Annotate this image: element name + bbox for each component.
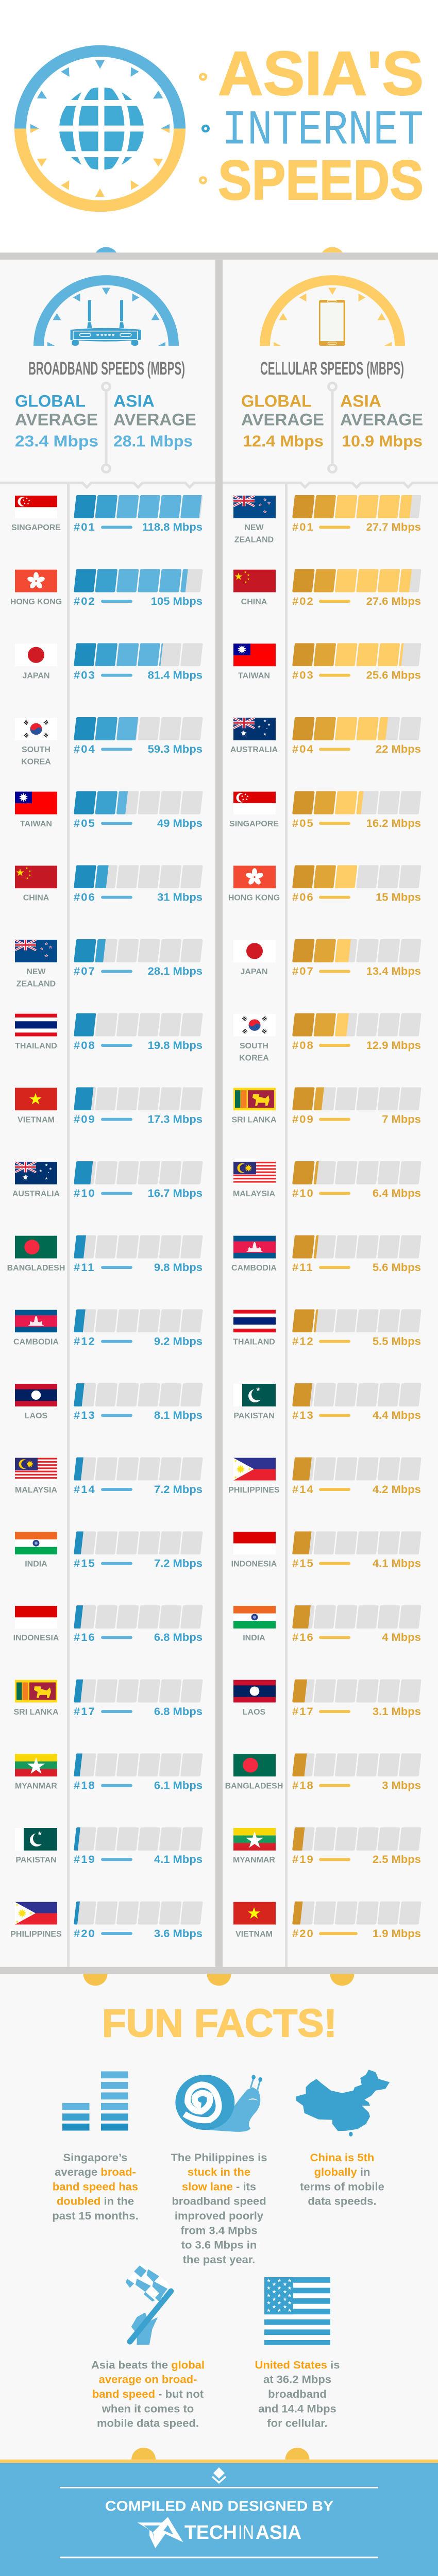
row: Vietnam: VIETNAM: [235, 1930, 273, 1939]
row: Sri Lanka: #09: [292, 1113, 314, 1125]
text: China fact: terms of mobile: [300, 2180, 384, 2193]
column dividers: [0, 260, 438, 1967]
row: Laos: [233, 1680, 422, 1718]
text: Philippines fact: stuck in the: [188, 2165, 250, 2178]
row: Cambodia: [231, 1235, 422, 1274]
stat divider: [329, 383, 336, 472]
row: Indonesia: [231, 1531, 422, 1569]
row: Hong Kong: [10, 569, 203, 607]
logo: Tech in Asia: ASIA: [256, 2521, 301, 2544]
icon: checkered flag: [126, 2263, 171, 2345]
row: Bangladesh: #18: [292, 1779, 314, 1791]
row: Philippines: #20: [74, 1927, 96, 1940]
row: Thailand: THAILAND: [15, 1042, 57, 1050]
row: South Korea: KOREA: [21, 758, 51, 767]
row: India: 7.2 Mbps: [154, 1557, 203, 1569]
row: Singapore: [229, 791, 422, 829]
logo: Tech in Asia: TECH: [184, 2521, 237, 2544]
row: South Korea: #08: [292, 1039, 314, 1052]
row: Taiwan: TAIWAN: [20, 820, 52, 828]
row: Vietnam: 17.3 Mbps: [148, 1113, 203, 1125]
row: Malaysia: 6.4 Mbps: [373, 1187, 421, 1199]
row: Myanmar: [233, 1827, 422, 1866]
row: Cambodia: CAMBODIA: [13, 1338, 59, 1346]
stat: asia average: 10.9 Mbps: [342, 433, 423, 450]
stat: global average: [15, 392, 98, 450]
row: Thailand: #12: [292, 1335, 314, 1347]
row: Malaysia: MALAYSIA: [233, 1190, 275, 1198]
row: Indonesia: 4.1 Mbps: [373, 1557, 421, 1569]
stat: asia average: ASIA: [340, 392, 381, 410]
text: United States fact: broadband: [268, 2387, 327, 2400]
row: New Zealand: NEW: [26, 968, 46, 976]
lower band with tabs: [0, 1967, 438, 1986]
row: China: 27.6 Mbps: [366, 595, 421, 607]
row: Laos: LAOS: [25, 1412, 47, 1420]
heading: fun facts: FUN FACTS!: [102, 2002, 337, 2045]
icon: router gauge: [33, 275, 179, 346]
row: Sri Lanka: #17: [74, 1705, 96, 1718]
row: India: #15: [74, 1557, 96, 1569]
text: Philippines fact: broadband speed: [172, 2195, 266, 2208]
row: Sri Lanka: [13, 1680, 203, 1718]
text: Philippines fact: the past year.: [183, 2253, 255, 2266]
stat divider: [102, 383, 110, 472]
row: India: 4 Mbps: [382, 1631, 421, 1643]
row: Cambodia: #11: [292, 1261, 313, 1274]
row: Singapore: #05: [292, 817, 314, 829]
logo: Tech in Asia: IN: [238, 2521, 254, 2544]
row: Australia: [230, 717, 422, 755]
icon: map of China: [296, 2070, 390, 2137]
row: Vietnam: #09: [74, 1113, 96, 1125]
row: Hong Kong: #06: [292, 891, 314, 903]
row: Bangladesh: [7, 1235, 203, 1274]
row: New Zealand: 28.1 Mbps: [148, 964, 203, 977]
text: Philippines fact: from 3.4 Mpbs: [180, 2224, 258, 2236]
row: Indonesia: [13, 1605, 203, 1643]
row: Thailand: [15, 1013, 203, 1052]
row: Malaysia: [233, 1161, 422, 1199]
row: China: [233, 569, 422, 607]
row: Cambodia: [13, 1309, 203, 1347]
text: China fact: China is 5th: [310, 2151, 374, 2164]
row: Taiwan: TAIWAN: [238, 672, 270, 681]
row: Thailand: 19.8 Mbps: [148, 1039, 203, 1052]
text: United States fact: [255, 2359, 340, 2429]
row: Thailand: THAILAND: [233, 1338, 275, 1346]
stat: asia average: AVERAGE: [113, 411, 196, 429]
stat: global average: GLOBAL: [241, 392, 312, 410]
row: Malaysia: [15, 1458, 203, 1496]
text: Singapore fact: Singapore’s: [63, 2151, 128, 2164]
row: Japan: #03: [74, 669, 96, 681]
row: Hong Kong: HONG KONG: [10, 598, 62, 606]
row: Bangladesh: [225, 1753, 422, 1791]
stat: global average: AVERAGE: [241, 411, 324, 429]
row: Malaysia: 7.2 Mbps: [154, 1483, 203, 1496]
row: New Zealand: [15, 939, 203, 989]
row: South Korea: KOREA: [239, 1054, 269, 1062]
row: Bangladesh: 9.8 Mbps: [154, 1261, 203, 1274]
text: Asia fact: average on broad-: [99, 2373, 197, 2386]
row: Taiwan: [15, 791, 203, 829]
row: Philippines: #14: [292, 1483, 314, 1496]
row: Philippines: 3.6 Mbps: [154, 1927, 203, 1940]
text: Asia fact: Asia beats the global: [91, 2359, 205, 2371]
row: Bangladesh: 3 Mbps: [382, 1779, 421, 1791]
row: Singapore: SINGAPORE: [229, 820, 279, 828]
row: Australia: 16.7 Mbps: [148, 1187, 203, 1199]
row: Singapore: #01: [74, 520, 96, 533]
row: South Korea: 12.9 Mbps: [366, 1039, 421, 1052]
row: Australia: #10: [74, 1187, 96, 1199]
stat: asia average: AVERAGE: [340, 411, 423, 429]
stat: global average: 23.4 Mbps: [15, 433, 98, 450]
row: Laos: #17: [292, 1705, 314, 1718]
row: Hong Kong: HONG KONG: [228, 894, 280, 903]
icon: snail: [175, 2075, 262, 2132]
row: Japan: [233, 939, 422, 977]
row: Sri Lanka: 6.8 Mbps: [154, 1705, 203, 1718]
text: Asia fact: mobile data speed.: [97, 2417, 199, 2429]
logo: Tech in Asia: [138, 2517, 301, 2548]
row: Cambodia: 5.6 Mbps: [373, 1261, 421, 1274]
row: New Zealand: ZEALAND: [16, 980, 56, 989]
row: New Zealand: #01: [292, 520, 314, 533]
row: Pakistan: PAKISTAN: [15, 1856, 57, 1865]
panel: cellular header: [241, 275, 423, 472]
footer tabs: [131, 2448, 309, 2460]
text: United States fact: for cellular.: [267, 2417, 328, 2429]
row: Sri Lanka: SRI LANKA: [13, 1708, 59, 1717]
row: Vietnam: 1.9 Mbps: [373, 1927, 421, 1940]
panel: footer: [0, 2460, 438, 2576]
row: Laos: 3.1 Mbps: [373, 1705, 421, 1718]
row: South Korea: [233, 1013, 422, 1062]
row: Myanmar: #18: [74, 1779, 96, 1791]
header background: [0, 0, 438, 252]
row: South Korea: #04: [74, 742, 96, 755]
row: Hong Kong: 15 Mbps: [376, 891, 421, 903]
icon: diamond: [212, 2467, 226, 2483]
row: Myanmar: 2.5 Mbps: [373, 1853, 421, 1866]
row: Hong Kong: #02: [74, 595, 96, 607]
row: Taiwan: 49 Mbps: [157, 817, 203, 829]
row: Australia: AUSTRALIA: [12, 1190, 60, 1198]
row: China: #06: [74, 891, 96, 903]
row: Taiwan: 25.6 Mbps: [366, 669, 421, 681]
icon: phone gauge: [260, 275, 405, 346]
row: Indonesia: INDONESIA: [13, 1634, 59, 1642]
row: Hong Kong: [228, 865, 422, 903]
row: Laos: #13: [74, 1409, 96, 1421]
text: Singapore fact: band speed has: [53, 2180, 138, 2193]
row: Japan: JAPAN: [23, 672, 49, 681]
icon: globe speedometer: [14, 45, 186, 212]
text: Singapore fact: [52, 2151, 139, 2222]
heading: broadband speeds: BROADBAND SPEEDS (MBPS): [28, 359, 185, 379]
credit text: COMPILED AND DESIGNED BY: [105, 2498, 333, 2514]
row: Laos: 8.1 Mbps: [154, 1409, 203, 1421]
row: South Korea: [15, 717, 203, 767]
row: Philippines: PHILIPPINES: [228, 1486, 280, 1495]
row: China: #02: [292, 595, 314, 607]
row: New Zealand: #07: [74, 964, 96, 977]
row: Indonesia: #16: [74, 1631, 96, 1643]
panel: broadband ranking: [7, 495, 203, 1940]
text: United States fact: United States is: [255, 2359, 340, 2371]
text: Singapore fact: average broad-: [55, 2165, 136, 2178]
row: Myanmar: 6.1 Mbps: [154, 1779, 203, 1791]
row: Taiwan: #03: [292, 669, 314, 681]
row: Malaysia: #10: [292, 1187, 314, 1199]
stat: global average: GLOBAL: [15, 392, 86, 410]
row: Myanmar: MYANMAR: [233, 1856, 276, 1865]
row: Pakistan: PAKISTAN: [233, 1412, 275, 1420]
row: New Zealand: [233, 495, 422, 545]
text: Philippines fact: [171, 2151, 267, 2266]
row: Taiwan: [233, 643, 422, 681]
row: Bangladesh: BANGLADESH: [225, 1782, 283, 1790]
row: Pakistan: #19: [74, 1853, 96, 1866]
row: Japan: 81.4 Mbps: [148, 669, 203, 681]
row: Philippines: PHILIPPINES: [10, 1930, 62, 1939]
row: Japan: [15, 643, 203, 681]
text: Philippines fact: improved poorly: [175, 2209, 263, 2222]
row: Philippines: [228, 1458, 422, 1496]
text: China fact: data speeds.: [308, 2195, 377, 2208]
row: Thailand: [233, 1309, 422, 1347]
row: Australia: [12, 1161, 203, 1199]
row: Malaysia: MALAYSIA: [15, 1486, 57, 1495]
title: [200, 39, 424, 212]
text: Asia fact: [91, 2359, 205, 2429]
text: Singapore fact: doubled in the: [57, 2195, 134, 2208]
text: Asia fact: band speed - but not: [92, 2387, 204, 2400]
row: South Korea: 59.3 Mbps: [148, 742, 203, 755]
row: Australia: AUSTRALIA: [230, 745, 278, 754]
icon: stacked bars: [62, 2071, 128, 2130]
text: Philippines fact: The Philippines is: [171, 2151, 267, 2164]
stat: global average: [241, 392, 324, 450]
row: Hong Kong: 105 Mbps: [151, 595, 203, 607]
row: Laos: LAOS: [243, 1708, 265, 1717]
row: India: #16: [292, 1631, 314, 1643]
row: Cambodia: CAMBODIA: [231, 1264, 277, 1273]
row: Myanmar: #19: [292, 1853, 314, 1866]
row: Australia: 22 Mbps: [376, 742, 421, 755]
row: India: [233, 1605, 422, 1643]
row: Vietnam: #20: [292, 1927, 314, 1940]
text: United States fact: at 36.2 Mbps: [263, 2373, 331, 2386]
row: South Korea: SOUTH: [22, 745, 50, 754]
stat: asia average: [340, 392, 423, 450]
title: ASIA'S: [218, 39, 424, 108]
text: China fact: globally in: [314, 2165, 370, 2178]
top band with tabs: [0, 247, 438, 260]
row: Pakistan: #13: [292, 1409, 314, 1421]
row: China: [15, 865, 203, 903]
row: Australia: #04: [292, 742, 314, 755]
row: India: [15, 1531, 203, 1569]
row: Pakistan: [233, 1383, 422, 1421]
row: China: CHINA: [241, 598, 267, 606]
panel: cellular ranking: [225, 495, 422, 1940]
row: Laos: [15, 1383, 203, 1421]
text: Philippines fact: slow lane - its: [182, 2180, 256, 2193]
row: Japan: #07: [292, 964, 314, 977]
row: India: INDIA: [243, 1634, 265, 1642]
row: Pakistan: [15, 1827, 203, 1866]
row: Pakistan: 4.4 Mbps: [373, 1409, 421, 1421]
row: New Zealand: NEW: [244, 523, 264, 532]
text: Philippines fact: to 3.6 Mbps in: [181, 2239, 257, 2251]
row: Vietnam: VIETNAM: [18, 1116, 55, 1125]
row: New Zealand: ZEALAND: [234, 536, 274, 545]
row: Thailand: #08: [74, 1039, 96, 1052]
row: Japan: JAPAN: [241, 968, 267, 976]
panel: broadband header: [15, 275, 196, 472]
row: South Korea: SOUTH: [240, 1042, 268, 1050]
stat: asia average: 28.1 Mbps: [113, 433, 193, 450]
row: Sri Lanka: SRI LANKA: [231, 1116, 277, 1125]
row: Thailand: 5.5 Mbps: [373, 1335, 421, 1347]
row: Bangladesh: #11: [74, 1261, 95, 1274]
row: Sri Lanka: [231, 1087, 422, 1125]
row: Philippines: [10, 1902, 203, 1940]
text: China fact: [300, 2151, 384, 2208]
row: Vietnam: [15, 1087, 203, 1125]
row: Myanmar: [15, 1753, 203, 1791]
row: Taiwan: #05: [74, 817, 96, 829]
row: Vietnam: [233, 1902, 422, 1940]
row: Indonesia: #15: [292, 1557, 314, 1569]
row: Singapore: [11, 495, 203, 533]
text: Singapore fact: past 15 months.: [52, 2209, 139, 2222]
row: Singapore: 16.2 Mbps: [366, 817, 421, 829]
stat: asia average: [113, 392, 196, 450]
row: Indonesia: INDONESIA: [231, 1560, 277, 1568]
row: Indonesia: 6.8 Mbps: [154, 1631, 203, 1643]
row: China: CHINA: [23, 894, 49, 903]
row: Cambodia: #12: [74, 1335, 96, 1347]
stat: asia average: ASIA: [113, 392, 155, 410]
stat: global average: 12.4 Mbps: [243, 433, 324, 450]
text: Asia fact: when it comes to: [102, 2402, 194, 2415]
row: Malaysia: #14: [74, 1483, 96, 1496]
row: Singapore: SINGAPORE: [11, 523, 61, 532]
row: China: 31 Mbps: [157, 891, 203, 903]
row: Pakistan: 4.1 Mbps: [154, 1853, 203, 1866]
text: United States fact: and 14.4 Mbps: [258, 2402, 336, 2415]
stat: global average: AVERAGE: [15, 411, 98, 429]
row: Singapore: 118.8 Mbps: [142, 520, 203, 533]
row: India: INDIA: [25, 1560, 47, 1568]
row: Cambodia: 9.2 Mbps: [154, 1335, 203, 1347]
row: Bangladesh: BANGLADESH: [7, 1264, 65, 1273]
row: Japan: 13.4 Mbps: [366, 964, 421, 977]
row: Sri Lanka: 7 Mbps: [382, 1113, 421, 1125]
icon: US flag: [264, 2277, 330, 2345]
row: New Zealand: 27.7 Mbps: [366, 520, 421, 533]
row: Philippines: 4.2 Mbps: [373, 1483, 421, 1496]
row: Myanmar: MYANMAR: [15, 1782, 58, 1790]
